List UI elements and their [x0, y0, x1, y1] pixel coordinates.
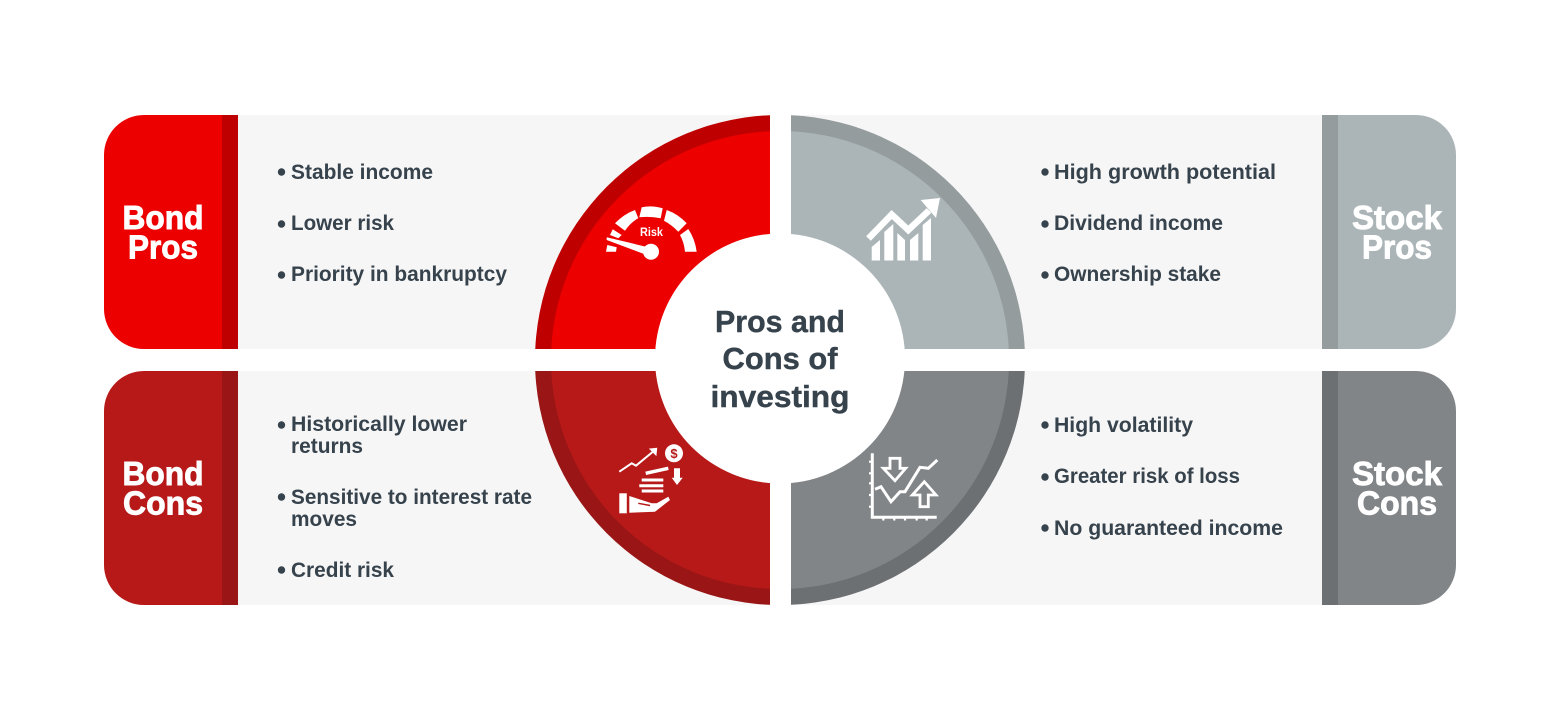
header: Stock Pros — [1322, 115, 1456, 349]
header: Bond Cons — [104, 371, 238, 605]
panel: Stock Pros — [791, 115, 1456, 349]
quadrant: Stock Cons — [791, 371, 1025, 605]
list: Stock Cons items: Greater risk of loss — [1054, 465, 1240, 488]
quadrant: Stock Pros — [791, 115, 1025, 349]
panel: Bond Cons — [104, 371, 770, 605]
list: Stock Pros items: Ownership stake — [1054, 263, 1221, 286]
header: Bond Pros: Pros — [128, 228, 198, 266]
icon: money in hand — [619, 444, 683, 513]
list: Stock Cons items: High volatility — [1054, 414, 1193, 437]
list: Stock Pros items: High growth potential — [1054, 161, 1276, 184]
center circle with title — [655, 234, 905, 484]
icon: money in hand: $ — [670, 446, 678, 461]
icon: risk gauge — [606, 206, 697, 260]
list: Bond Cons items — [278, 413, 532, 582]
panel: Bond Pros — [104, 115, 770, 349]
header: Stock Cons: Stock — [1352, 455, 1443, 492]
title: Cons of — [722, 341, 838, 376]
icon: volatile chart with arrows — [869, 453, 937, 520]
list: Stock Cons items: No guaranteed income — [1054, 517, 1283, 540]
list: Bond Pros items: Stable income — [291, 161, 433, 184]
list: Bond Pros items: Lower risk — [291, 212, 394, 235]
list: Bond Cons items: Credit risk — [291, 559, 394, 582]
icon: risk gauge: Risk — [640, 225, 663, 239]
header: Bond Pros: Bond — [122, 199, 204, 236]
panel: Stock Cons — [791, 371, 1456, 605]
list: Bond Pros items: Priority in bankruptcy — [291, 263, 507, 286]
header: Stock Pros: Stock — [1352, 199, 1443, 236]
header: Bond Pros — [104, 115, 238, 349]
list: Bond Cons items: Sensitive to interest rate — [291, 486, 532, 509]
list: Stock Cons items — [1041, 414, 1283, 540]
title — [710, 304, 850, 414]
list: Stock Pros items — [1041, 161, 1276, 286]
list: Bond Cons items: returns — [291, 435, 363, 458]
title: investing — [710, 379, 850, 414]
header: Stock Cons — [1322, 371, 1456, 605]
icon: growth chart — [868, 198, 940, 260]
header: Bond Cons: Bond — [122, 455, 204, 492]
quadrant: Bond Cons — [535, 371, 770, 605]
list: Bond Cons items: moves — [291, 508, 357, 531]
header: Stock Pros: Pros — [1362, 228, 1432, 266]
list: Bond Cons items: Historically lower — [291, 413, 467, 436]
header: Bond Cons: Cons — [123, 484, 203, 522]
title: Pros and — [715, 304, 845, 339]
header: Stock Cons: Cons — [1357, 484, 1437, 522]
quadrant: Bond Pros — [535, 115, 770, 349]
list: Bond Pros items — [278, 161, 507, 286]
list: Stock Pros items: Dividend income — [1054, 212, 1223, 235]
